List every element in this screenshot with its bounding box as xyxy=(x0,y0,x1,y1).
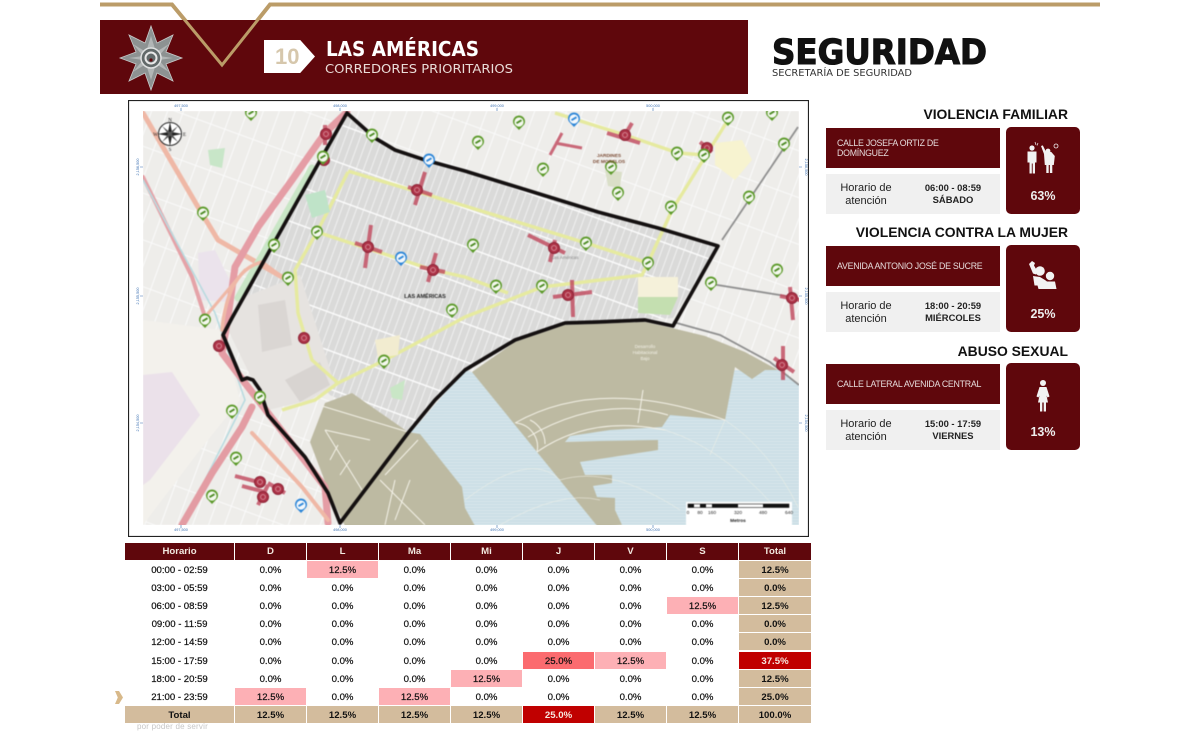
pins: green markers xyxy=(197,107,790,504)
table: incidents by hour and weekday: 00:00 - 02:59 xyxy=(151,565,208,576)
street: violencia contra la mujer: AVENIDA ANTONIO JOSÉ DE SUCRE xyxy=(837,261,982,271)
map coordinate ticks: 2,155,500 xyxy=(804,288,808,304)
table: incidents by hour and weekday: 0.0% xyxy=(404,637,425,648)
stat card: violencia familiar xyxy=(1006,127,1080,214)
table: incidents by hour and weekday: 12.5% xyxy=(257,692,284,703)
street: violencia contra la mujer xyxy=(826,246,1000,286)
map place labels: Bajo xyxy=(640,356,650,361)
table: incidents by hour and weekday: 0.0% xyxy=(332,601,353,612)
table: incidents by hour and weekday: 21:00 - 23:59 xyxy=(151,692,208,703)
table: incidents by hour and weekday: 0.0% xyxy=(260,674,281,685)
map coordinate ticks: 500,000 xyxy=(646,528,660,532)
scale bar: 80 xyxy=(697,510,703,516)
table: incidents by hour and weekday: 12.5% xyxy=(401,710,428,721)
table: incidents by hour and weekday: Total xyxy=(764,546,786,557)
schedule: violencia contra la mujer xyxy=(826,292,1000,332)
landfill streets xyxy=(322,390,798,525)
table: incidents by hour and weekday: V xyxy=(627,546,634,557)
map body xyxy=(143,107,800,527)
table: incidents by hour and weekday: 0.0% xyxy=(476,656,497,667)
table: incidents by hour and weekday: 37.5% xyxy=(761,656,789,667)
roads: east gray avenues xyxy=(673,127,799,385)
map place labels: Las Américas xyxy=(551,255,579,260)
street: violencia familiar: DOMÍNGUEZ xyxy=(837,148,889,158)
table: incidents by hour and weekday: 0.0% xyxy=(332,656,353,667)
panel: map xyxy=(128,100,809,537)
street: abuso sexual: CALLE LATERAL AVENIDA CENTRAL xyxy=(837,379,981,389)
map coordinate ticks: 2,156,500 xyxy=(136,159,140,175)
icon: compass rose: W xyxy=(153,133,158,138)
banner title: LAS AMÉRICAS xyxy=(326,37,479,61)
zone: water xyxy=(400,370,799,525)
table: incidents by hour and weekday: 0.0% xyxy=(332,637,353,648)
map place labels: Desarrollo xyxy=(635,344,656,349)
schedule: abuso sexual: atención xyxy=(845,431,887,443)
table: incidents by hour and weekday: 0.0% xyxy=(404,674,425,685)
header banner xyxy=(100,20,748,94)
schedule: violencia familiar: Horario de xyxy=(840,182,892,194)
street: abuso sexual xyxy=(826,364,1000,404)
table: incidents by hour and weekday: 0.0% xyxy=(620,637,641,648)
table: incidents by hour and weekday: 0.0% xyxy=(476,565,497,576)
table: incidents by hour and weekday: 12.5% xyxy=(689,601,716,612)
scale bar: 320 xyxy=(734,510,742,516)
stat card: violencia familiar: 63% xyxy=(1030,189,1056,203)
table: incidents by hour and weekday: D xyxy=(267,546,274,557)
table: incidents by hour and weekday: 06:00 - 08:59 xyxy=(151,601,208,612)
hotspots: crime streets xyxy=(235,123,800,505)
table: incidents by hour and weekday: Mi xyxy=(481,546,492,557)
street: violencia familiar: CALLE JOSEFA ORTIZ DE xyxy=(837,138,939,148)
icon: compass rose: E xyxy=(183,133,186,138)
table: incidents by hour and weekday: 12.5% xyxy=(473,710,500,721)
icon: aggressor striking victim xyxy=(1029,261,1056,289)
table: incidents by hour and weekday: 0.0% xyxy=(332,692,353,703)
zone: residential inside corridor xyxy=(232,113,718,433)
map coordinate ticks: 500,000 xyxy=(646,104,660,108)
zone: south landfill xyxy=(310,393,475,526)
map place labels: LAS AMÉRICAS xyxy=(404,292,446,300)
table: incidents by hour and weekday: Ma xyxy=(408,546,421,557)
zone: west open land xyxy=(148,335,221,482)
table: incidents by hour and weekday: 0.0% xyxy=(260,637,281,648)
zone: east landfill xyxy=(472,322,778,527)
scale bar: 480 xyxy=(759,510,767,516)
table: incidents by hour and weekday: 12.5% xyxy=(689,710,716,721)
gold header line with chevron xyxy=(100,2,1100,20)
stat card: violencia contra la mujer: 25% xyxy=(1030,307,1056,321)
map coordinate ticks: 2,156,500 xyxy=(804,159,808,175)
schedule: violencia contra la mujer: MIÉRCOLES xyxy=(925,312,981,323)
table: incidents by hour and weekday: 0.0% xyxy=(260,619,281,630)
table: incidents by hour and weekday: 0.0% xyxy=(548,619,569,630)
table: incidents by hour and weekday: 0.0% xyxy=(764,619,786,630)
table: incidents by hour and weekday: 0.0% xyxy=(620,583,641,594)
schedule: abuso sexual: VIERNES xyxy=(932,430,974,441)
table: incidents by hour and weekday: 0.0% xyxy=(548,692,569,703)
table: incidents by hour and weekday: 0.0% xyxy=(620,692,641,703)
hotspots: red circles xyxy=(214,128,798,502)
table: incidents by hour and weekday: 0.0% xyxy=(260,601,281,612)
map coordinate ticks: 2,154,500 xyxy=(136,415,140,431)
table: incidents by hour and weekday: 0.0% xyxy=(548,601,569,612)
scale bar: Metros xyxy=(730,518,746,524)
table: incidents by hour and weekday: 0.0% xyxy=(548,583,569,594)
table: incidents by hour and weekday: 25.0% xyxy=(545,710,572,721)
roads: highways xyxy=(143,112,347,525)
heading: violencia familiar: VIOLENCIA FAMILIAR xyxy=(923,106,1068,122)
map place labels: JARDINES xyxy=(597,153,622,159)
table: incidents by hour and weekday: 0.0% xyxy=(548,674,569,685)
table: incidents by hour and weekday: 0.0% xyxy=(764,583,786,594)
table: incidents by hour and weekday: 12.5% xyxy=(761,601,789,612)
table: incidents by hour and weekday: 12.5% xyxy=(617,710,644,721)
stat card: abuso sexual xyxy=(1006,363,1080,450)
table: incidents by hour and weekday: 0.0% xyxy=(260,583,281,594)
table: incidents by hour and weekday: 03:00 - 05:59 xyxy=(151,583,208,594)
icon: compass rose xyxy=(153,118,186,153)
table: incidents by hour and weekday: 0.0% xyxy=(476,601,497,612)
table: incidents by hour and weekday: 0.0% xyxy=(620,674,641,685)
table: incidents by hour and weekday: 12.5% xyxy=(617,656,644,667)
scale bar: 160 xyxy=(708,510,716,516)
table: incidents by hour and weekday: 0.0% xyxy=(476,692,497,703)
table: incidents by hour and weekday: 0.0% xyxy=(404,565,425,576)
table: incidents by hour and weekday: 0.0% xyxy=(692,565,713,576)
table: incidents by hour and weekday: Horario xyxy=(162,546,197,557)
scale bar: 640 xyxy=(785,510,793,516)
table: incidents by hour and weekday: 0.0% xyxy=(404,656,425,667)
icon: police star badge xyxy=(119,25,183,91)
table: incidents by hour and weekday: 12.5% xyxy=(473,674,500,685)
table: incidents by hour and weekday: 0.0% xyxy=(764,637,786,648)
table: incidents by hour and weekday: 0.0% xyxy=(332,619,353,630)
banner title: CORREDORES PRIORITARIOS xyxy=(325,62,513,76)
stat card: abuso sexual: 13% xyxy=(1030,425,1056,439)
map coordinate ticks: 498,000 xyxy=(333,528,347,532)
map place labels: DE MORELOS xyxy=(593,159,626,165)
table: incidents by hour and weekday: 0.0% xyxy=(620,565,641,576)
parks and institutions xyxy=(638,277,678,297)
table: incidents by hour and weekday: 25.0% xyxy=(545,656,572,667)
table: incidents by hour and weekday: 25.0% xyxy=(761,692,789,703)
table: incidents by hour and weekday: 0.0% xyxy=(620,619,641,630)
scale bar: 0 xyxy=(687,510,690,516)
table: incidents by hour and weekday: 0.0% xyxy=(332,583,353,594)
corridor boundary xyxy=(223,113,718,523)
zone: shopping mall xyxy=(228,275,335,410)
heading: abuso sexual: ABUSO SEXUAL xyxy=(958,343,1068,359)
map coordinate ticks: 499,000 xyxy=(490,528,504,532)
heading: violencia contra la mujer: VIOLENCIA CONTRA LA MUJER xyxy=(856,224,1068,240)
section number tag xyxy=(264,40,315,73)
table: incidents by hour and weekday: 0.0% xyxy=(404,583,425,594)
table: incidents by hour and weekday: 0.0% xyxy=(692,583,713,594)
table: incidents by hour and weekday: 0.0% xyxy=(692,619,713,630)
map place labels: Habitacional xyxy=(633,350,657,355)
schedule: abuso sexual xyxy=(826,410,1000,450)
table: incidents by hour and weekday: 100.0% xyxy=(759,710,791,721)
table: incidents by hour and weekday: 09:00 - 11:59 xyxy=(152,619,207,630)
table: incidents by hour and weekday: 12.5% xyxy=(761,565,789,576)
logo: Seguridad: SEGURIDAD xyxy=(772,33,987,73)
table: incidents by hour and weekday: 0.0% xyxy=(692,674,713,685)
table: incidents by hour and weekday: 12:00 - 14:59 xyxy=(151,637,208,648)
table: incidents by hour and weekday: L xyxy=(340,546,345,557)
banner title xyxy=(325,37,513,76)
logo: Seguridad: SECRETARÍA DE SEGURIDAD xyxy=(772,67,912,79)
table: incidents by hour and weekday: 0.0% xyxy=(332,674,353,685)
schedule: violencia familiar: SÁBADO xyxy=(933,194,973,205)
icon: man and woman in conflict xyxy=(1028,142,1058,174)
schedule: abuso sexual: 15:00 - 17:59 xyxy=(925,418,981,429)
map coordinate ticks: 2,154,500 xyxy=(804,415,808,431)
table: incidents by hour and weekday: 0.0% xyxy=(692,637,713,648)
schedule: violencia familiar: 06:00 - 08:59 xyxy=(925,182,981,193)
icon: woman figure xyxy=(1036,380,1050,412)
scale bar xyxy=(686,502,793,526)
map coordinate ticks: 497,500 xyxy=(174,528,188,532)
table: incidents by hour and weekday: 12.5% xyxy=(257,710,284,721)
table: incidents by hour and weekday: J xyxy=(556,546,561,557)
table: incidents by hour and weekday: 12.5% xyxy=(401,692,428,703)
section number tag: 10 xyxy=(275,44,299,69)
table: incidents by hour and weekday: 0.0% xyxy=(404,601,425,612)
table: incidents by hour and weekday: 0.0% xyxy=(476,637,497,648)
table: incidents by hour and weekday: 0.0% xyxy=(476,619,497,630)
table: incidents by hour and weekday: 0.0% xyxy=(260,565,281,576)
table: incidents by hour and weekday: 0.0% xyxy=(476,583,497,594)
gold chevron over banner xyxy=(183,20,260,68)
table: incidents by hour and weekday: 18:00 - 20:59 xyxy=(151,674,208,685)
schedule: violencia contra la mujer: Horario de xyxy=(840,300,892,312)
stat card: violencia contra la mujer xyxy=(1006,245,1080,332)
schedule: violencia familiar xyxy=(826,174,1000,214)
map figure xyxy=(128,100,809,537)
icon: compass rose: N xyxy=(168,118,172,124)
table: incidents by hour and weekday: S xyxy=(699,546,706,557)
schedule: violencia contra la mujer: 18:00 - 20:59 xyxy=(925,300,981,311)
roads: corridors xyxy=(282,113,728,410)
street: violencia familiar xyxy=(826,128,1000,168)
map coordinate ticks: 498,000 xyxy=(333,104,347,108)
table: incidents by hour and weekday: Total xyxy=(168,710,191,721)
schedule: violencia familiar: atención xyxy=(845,195,887,207)
table: incidents by hour and weekday: 0.0% xyxy=(548,565,569,576)
icon: compass rose: S xyxy=(169,148,172,153)
table: incidents by hour and weekday: 12.5% xyxy=(329,565,356,576)
faint footer text: por poder de servir xyxy=(137,722,208,731)
map coordinate ticks: 2,155,500 xyxy=(136,288,140,304)
table: incidents by hour and weekday: 0.0% xyxy=(260,656,281,667)
decorative fragment beside table xyxy=(115,691,123,704)
table: incidents by hour and weekday: 0.0% xyxy=(692,692,713,703)
table: incidents by hour and weekday: 0.0% xyxy=(548,637,569,648)
table: incidents by hour and weekday xyxy=(125,543,811,723)
schedule: violencia contra la mujer: atención xyxy=(845,313,887,325)
map coordinate ticks: 499,000 xyxy=(490,104,504,108)
table: incidents by hour and weekday: 0.0% xyxy=(404,619,425,630)
table: incidents by hour and weekday: 0.0% xyxy=(692,656,713,667)
map place labels xyxy=(404,153,657,361)
table: incidents by hour and weekday: 12.5% xyxy=(329,710,356,721)
map coordinate ticks xyxy=(136,104,808,532)
table: incidents by hour and weekday: 15:00 - 17:59 xyxy=(151,656,208,667)
map coordinate ticks: 497,500 xyxy=(174,104,188,108)
map frame xyxy=(128,100,808,536)
table: incidents by hour and weekday: 12.5% xyxy=(761,674,789,685)
pins: blue markers xyxy=(295,113,580,513)
schedule: abuso sexual: Horario de xyxy=(840,418,892,430)
table: incidents by hour and weekday: 0.0% xyxy=(620,601,641,612)
